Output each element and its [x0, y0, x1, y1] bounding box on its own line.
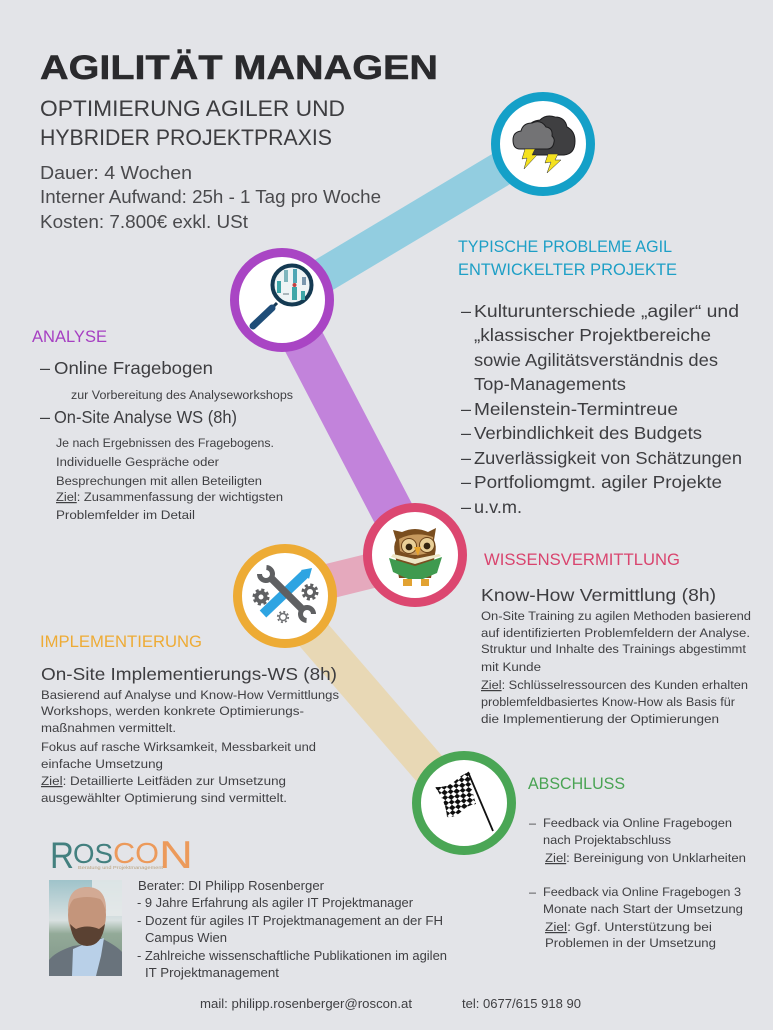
text: first feedback — [529, 816, 746, 865]
project facts: Dauer: 4 Wochen — [40, 163, 192, 183]
contact: phone: tel: 0677/615 918 90 — [462, 997, 581, 1011]
text: on-site implementation workshop: On-Site Implementierungs-WS (8h) — [41, 664, 337, 684]
heading: analysis: ANALYSE — [32, 328, 107, 346]
contact: email: mail: philipp.rosenberger@roscon.at — [200, 997, 413, 1011]
title: AGILITÄT MANAGEN — [40, 49, 438, 87]
list: typical problems — [461, 301, 742, 517]
text: analysis description: Je nach Ergebnissen des Fragebogens. — [56, 436, 274, 450]
heading: completion: ABSCHLUSS — [528, 775, 625, 793]
logo: Roscon — [50, 834, 193, 877]
heading: typical problems — [458, 238, 677, 279]
subtitle: OPTIMIERUNG AGILER UND — [40, 96, 345, 121]
text: second feedback: Monate nach Start der Umsetzung — [543, 902, 743, 916]
text: training description: On-Site Training zu agilen Methoden basierend — [481, 609, 751, 623]
list: typical problems: sowie Agilitätsverständnis des — [474, 350, 718, 370]
text: online questionnaire: Online Fragebogen — [54, 358, 213, 378]
text: online questionnaire: – — [40, 358, 50, 378]
list: typical problems: – — [461, 497, 471, 517]
icon: owl with book — [389, 528, 442, 586]
text: on-site analysis: – — [40, 407, 50, 427]
list: typical problems: – — [461, 301, 471, 321]
node: analysis (magnifier) — [234, 252, 330, 348]
logo: Roscon: R — [50, 835, 74, 876]
icon: checkered flag — [435, 772, 493, 831]
text: consultant bio: IT Projektmanagement — [145, 966, 280, 980]
node: implementation (tools) — [238, 548, 332, 644]
text: implementation description: Basierend auf Analyse und Know-How Vermittlungs — [41, 688, 339, 702]
logo: Roscon: CO — [113, 838, 159, 870]
list: typical problems: Kulturunterschiede „agiler“ und — [474, 301, 739, 321]
text: analysis description: Individuelle Gespräche oder — [56, 455, 219, 469]
list: typical problems: – — [461, 399, 471, 419]
text: implementation description: ausgewählter Optimierung sind vermittelt. — [41, 791, 287, 805]
text: questionnaire purpose: zur Vorbereitung des Analyseworkshops — [71, 388, 293, 402]
connector: knowledge transfer to implementation — [285, 560, 415, 592]
text: first feedback: – — [529, 816, 536, 830]
list: typical problems: – — [461, 423, 471, 443]
subtitle: HYBRIDER PROJEKTPRAXIS — [40, 125, 332, 150]
connector: analysis to knowledge transfer — [282, 300, 415, 555]
text: consultant bio: - Dozent für agiles IT Projektmanagement an der FH — [137, 914, 443, 928]
section: knowledge transfer — [481, 551, 751, 726]
text: implementation description — [41, 688, 339, 805]
text: analysis description: Ziel: Zusammenfassung der wichtigsten — [56, 490, 283, 504]
list: typical problems: – — [461, 472, 471, 492]
text: training description: Struktur und Inhalte des Trainings abgestimmt — [481, 642, 747, 656]
icon: wrench, pencil and gears — [254, 567, 317, 622]
text: second feedback — [529, 885, 743, 950]
text: training description: mit Kunde — [481, 660, 541, 674]
photo: consultant portrait — [49, 880, 122, 976]
text: consultant bio — [137, 879, 447, 980]
text: second feedback: Feedback via Online Fragebogen 3 — [543, 885, 741, 899]
text: on-site analysis: On-Site Analyse WS (8h) — [54, 407, 237, 427]
text: training description: auf identifizierten Problemfeldern der Analyse. — [481, 626, 750, 640]
node: completion (checkered flag) — [416, 756, 512, 850]
heading: implementation: IMPLEMENTIERUNG — [40, 633, 202, 651]
icon: storm cloud — [513, 116, 575, 173]
heading: typical problems: ENTWICKELTER PROJEKTE — [458, 261, 677, 279]
text: implementation description: Workshops, werden konkrete Optimierungs- — [41, 704, 304, 718]
list: typical problems: u.v.m. — [474, 497, 522, 517]
text: implementation description: Ziel: Detaillierte Leitfäden zur Umsetzung — [41, 774, 286, 788]
heading: typical problems: TYPISCHE PROBLEME AGIL — [458, 238, 672, 256]
text: implementation description: Fokus auf rasche Wirksamkeit, Messbarkeit und — [41, 740, 316, 754]
icon: magnifier with people — [253, 266, 312, 326]
project facts — [40, 163, 381, 232]
heading: knowledge transfer: WISSENSVERMITTLUNG — [484, 551, 680, 569]
text: consultant bio: - 9 Jahre Erfahrung als agiler IT Projektmanager — [137, 896, 413, 910]
text: training description: Ziel: Schlüsselressourcen des Kunden erhalten — [481, 678, 748, 692]
text: second feedback: – — [529, 885, 536, 899]
connector: implementation to completion — [280, 596, 459, 803]
text: consultant bio: Berater: DI Philipp Rosenberger — [138, 879, 324, 893]
text: consultant bio: - Zahlreiche wissenschaftliche Publikationen im agilen — [137, 949, 447, 963]
list: typical problems: Top-Managements — [474, 374, 626, 394]
text: analysis description — [56, 436, 283, 522]
text: training description: problemfeldbasiertes Know-How als Basis für — [481, 695, 735, 709]
text: consultant bio: Campus Wien — [145, 931, 227, 945]
logo: Roscon: N — [159, 834, 193, 877]
text: know-how transfer: Know-How Vermittlung (8h) — [481, 585, 716, 605]
list: typical problems: Meilenstein-Termintreue — [474, 399, 678, 419]
text: first feedback: nach Projektabschluss — [543, 833, 671, 847]
project facts: Kosten: 7.800€ exkl. USt — [40, 212, 248, 232]
connector: problems to analysis — [282, 144, 543, 300]
text: implementation description: einfache Umsetzung — [41, 757, 163, 771]
section: completion — [528, 775, 746, 950]
section: analysis — [32, 328, 293, 522]
logo: Roscon: OS — [73, 838, 113, 869]
list: typical problems: Zuverlässigkeit von Schätzungen — [474, 448, 742, 468]
text: training description: die Implementierung der Optimierungen — [481, 712, 719, 726]
text: analysis description: Besprechungen mit allen Beteiligten — [56, 474, 262, 488]
text: analysis description: Problemfelder im Detail — [56, 508, 195, 522]
node: problems (storm cloud) — [496, 96, 590, 192]
text: first feedback: Ziel: Bereinigung von Unklarheiten — [545, 851, 746, 865]
project facts: Interner Aufwand: 25h - 1 Tag pro Woche — [40, 187, 381, 207]
list: typical problems: Portfoliomgmt. agiler Projekte — [474, 472, 722, 492]
text: training description — [481, 609, 751, 726]
logo: Roscon: Beratung und Projektmanagement — [78, 865, 164, 870]
section: implementation — [40, 633, 339, 805]
text: implementation description: maßnahmen vermittelt. — [41, 721, 176, 735]
text: first feedback: Feedback via Online Fragebogen — [543, 816, 732, 830]
node: knowledge transfer (owl) — [368, 508, 462, 602]
subtitle — [40, 96, 345, 150]
list: typical problems: „klassischer Projektbereiche — [474, 325, 711, 345]
text: second feedback: Ziel: Ggf. Unterstützung bei — [545, 920, 712, 934]
list: typical problems: Verbindlichkeit des Budgets — [474, 423, 702, 443]
text: second feedback: Problemen in der Umsetzung — [545, 936, 716, 950]
list: typical problems: – — [461, 448, 471, 468]
